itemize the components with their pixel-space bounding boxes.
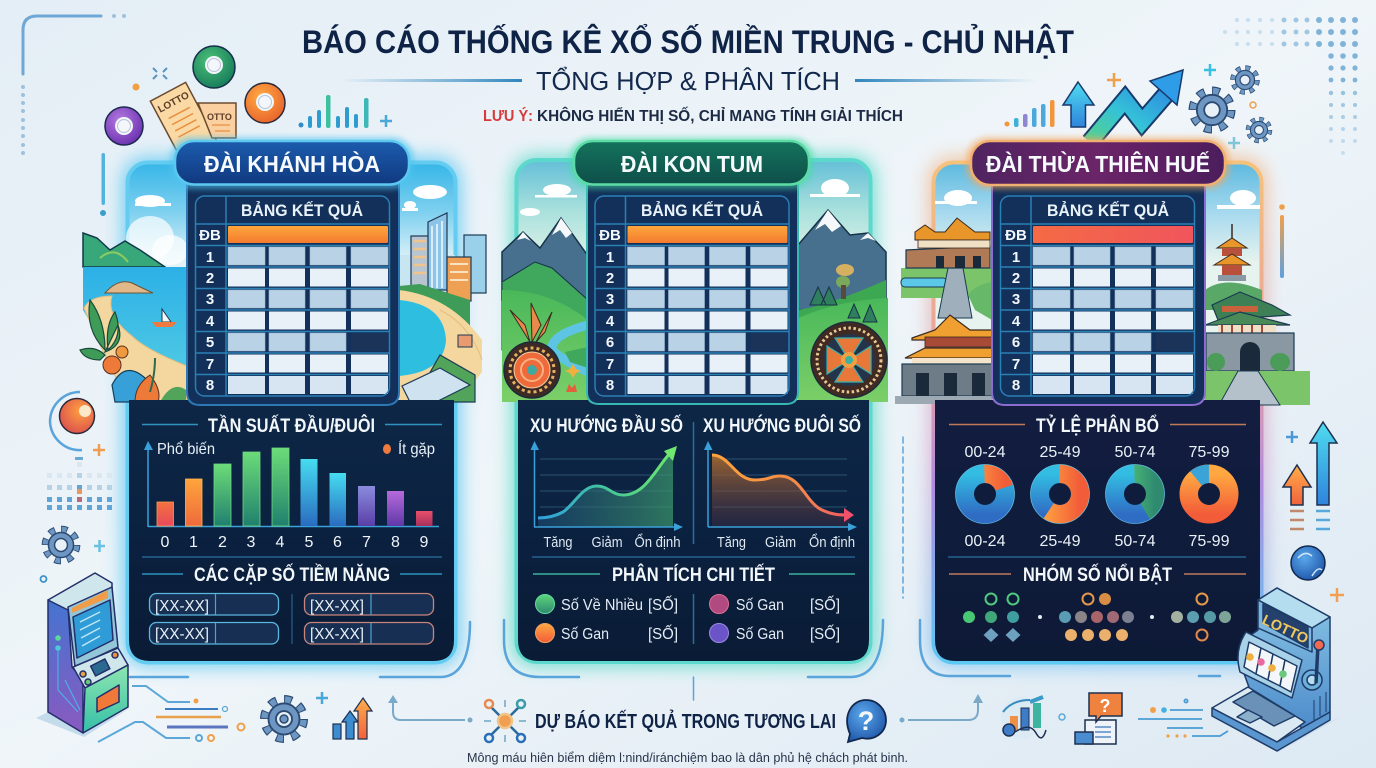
headings: Xu hướng đầu số / đuôi số (530, 415, 861, 544)
table 2: Kon Tum: 8 (606, 377, 614, 394)
table 1: Khánh Hòa: BẢNG KẾT QUẢ (241, 201, 363, 220)
illustration: lotto slot machine (1212, 588, 1342, 752)
bar chart: frequency: 3 (247, 534, 256, 551)
line chart: đuôi số (704, 441, 857, 551)
heading: Tần suất đầu/đuôi: TẦN SUẤT ĐẦU/ĐUÔI (208, 415, 375, 437)
detail legend: [SỐ] (648, 594, 678, 614)
bar chart: frequency: 2 (218, 534, 227, 551)
line chart: đuôi số: Tăng (717, 534, 746, 551)
header pill: Đài Khánh Hòa (170, 137, 414, 189)
bar chart: frequency: 1 (189, 534, 198, 551)
subtitle with rules (340, 66, 1036, 96)
header pill: Đài Kon Tum: ĐÀI KON TUM (621, 150, 763, 177)
detail legend: Số Gan (736, 597, 784, 614)
table 3: Thừa Thiên Huế: 1 (1012, 249, 1020, 266)
line chart: đầu số (530, 441, 683, 551)
table 3: Thừa Thiên Huế: ĐB (1005, 227, 1027, 244)
bar chart: frequency: 8 (391, 534, 400, 551)
detail legend: [SỐ] (810, 594, 840, 614)
bar chart: frequency: 6 (333, 534, 342, 551)
line chart: đầu số: Ổn định (634, 533, 680, 551)
bar chart: frequency: 0 (161, 534, 170, 551)
table 2: Kon Tum: 1 (606, 249, 614, 266)
scene: Huế pagoda and gate right (1205, 190, 1310, 405)
header pill: Đài Thừa Thiên Huế: ĐÀI THỪA THIÊN HUẾ (986, 150, 1210, 177)
table 1: Khánh Hòa (187, 183, 399, 405)
table 3: Thừa Thiên Huế: 4 (1012, 313, 1021, 330)
title: BÁO CÁO THỐNG KÊ XỔ SỐ MIỀN TRUNG - CHỦ NHẬT (302, 24, 1074, 60)
decoration: lottery balls and tickets (105, 46, 285, 163)
donut charts: distribution: 50-74 (1114, 533, 1156, 550)
decoration: lottery balls and tickets: OTTO (207, 112, 232, 122)
potential pairs list: [XX-XX] (155, 598, 209, 615)
scene: Kon Tum mountains left (502, 184, 588, 402)
detail legend: [SỐ] (810, 623, 840, 643)
panel 2 dark body (518, 400, 869, 661)
table 2: Kon Tum: 6 (606, 334, 614, 351)
decoration: growth arrows and gears top-right (1004, 64, 1285, 278)
table 2: Kon Tum: 7 (606, 356, 614, 373)
icon: chart with magnifier (1001, 697, 1065, 739)
footnote: Mông máu hiên biểm diệm l:nind/iránchiệm bao là dân phủ hệ chách phát binh. (467, 751, 908, 765)
table 2: Kon Tum: 3 (606, 291, 614, 308)
scene: Kon Tum mountains right (798, 179, 888, 402)
table 1: Khánh Hòa: ĐB (199, 227, 221, 244)
icon: question bubble: ? (858, 706, 874, 736)
potential pairs list: [XX-XX] (310, 598, 364, 615)
heading: Tỷ lệ phân bổ: TỶ LỆ PHÂN BỔ (1036, 415, 1159, 437)
table 1: Khánh Hòa: 1 (206, 249, 214, 266)
detail legend: [SỐ] (648, 623, 678, 643)
illustration: kiosk machine (36, 573, 130, 737)
icon: bottom gear (265, 692, 328, 738)
line chart: đuôi số: Ổn định (809, 533, 855, 551)
decoration: top-right dot grid (1223, 17, 1358, 155)
panel 1 glow and frame (122, 157, 461, 667)
table 1: Khánh Hòa: 4 (206, 313, 215, 330)
table 2: Kon Tum: 4 (606, 313, 615, 330)
donut charts: distribution: 00-24 (964, 444, 1006, 461)
detail legend: Số Gan (561, 626, 609, 643)
header pill: Đài Khánh Hòa: ĐÀI KHÁNH HÒA (204, 150, 380, 177)
table 2: Kon Tum: ĐB (599, 227, 621, 244)
bar chart: frequency: 7 (362, 534, 371, 551)
table 2: Kon Tum (587, 183, 798, 404)
illustration: lotto slot machine: LOTTO (1259, 612, 1311, 648)
line chart: đầu số: Giảm (592, 534, 622, 551)
icon: question bubble (847, 700, 886, 742)
panel 2 glow and frame (511, 155, 876, 667)
footer heading: DỰ BÁO KẾT QUẢ TRONG TƯƠNG LAI (535, 710, 836, 733)
donut charts: distribution: 25-49 (1040, 444, 1081, 461)
decoration: top-left corner bracket and dots (21, 14, 126, 216)
table 3: Thừa Thiên Huế: BẢNG KẾT QUẢ (1047, 201, 1169, 220)
line chart: đuôi số: Giảm (765, 534, 796, 551)
table 2: Kon Tum: BẢNG KẾT QUẢ (641, 201, 763, 220)
table 3: Thừa Thiên Huế: 8 (1012, 377, 1020, 394)
table 1: Khánh Hòa: 7 (206, 356, 214, 373)
scene: Khánh Hòa beach left (80, 195, 188, 402)
heading: Phân tích chi tiết: PHÂN TÍCH CHI TIẾT (612, 564, 775, 586)
table 1: Khánh Hòa: 5 (206, 334, 214, 351)
arrow: left flow (388, 695, 472, 722)
panel 3 dark body (935, 400, 1260, 661)
donut charts: distribution: 00-24 (964, 533, 1006, 550)
icon: network hub (484, 700, 526, 742)
potential pairs list: [XX-XX] (310, 626, 364, 643)
decoration: circuit lines left (98, 686, 244, 742)
bar chart: frequency: 9 (420, 534, 429, 551)
number group dots (963, 593, 1231, 642)
heading: Nhóm số nổi bật: NHÓM SỐ NỔI BẬT (1023, 564, 1172, 586)
icon: document with question: ? (1100, 696, 1110, 716)
table 1: Khánh Hòa: 2 (206, 270, 214, 287)
bar chart: frequency (144, 439, 439, 551)
subtitle with rules: TỔNG HỢP & PHÂN TÍCH (536, 66, 840, 96)
icon: left gear (40, 530, 105, 582)
scene: Huế citadel left (895, 190, 993, 404)
potential pairs list (150, 594, 434, 644)
detail legend: Số Về Nhiều (561, 597, 643, 614)
detail legend (536, 594, 840, 644)
heading: Các cặp số tiềm năng: CÁC CẶP SỐ TIỀM NĂNG (194, 564, 390, 586)
scene: Khánh Hòa city right (399, 185, 486, 402)
headings: Xu hướng đầu số / đuôi số: XU HƯỚNG ĐẦU SỐ (530, 415, 683, 437)
detail legend: Số Gan (736, 626, 784, 643)
panel brackets (130, 437, 1220, 700)
table 3: Thừa Thiên Huế: 2 (1012, 270, 1020, 287)
line chart: đầu số: Tăng (544, 534, 572, 551)
bar chart: frequency: 4 (276, 534, 285, 551)
icon: document with question (1075, 693, 1122, 744)
decoration: pixel grid bars (47, 457, 112, 510)
decoration: lottery balls and tickets: LOTTO (156, 90, 192, 116)
header pill: Đài Kon Tum (569, 137, 814, 189)
decoration: mini bars top-left (298, 95, 392, 128)
icon: bars with arrows (333, 698, 372, 739)
donut charts: distribution: 75-99 (1188, 444, 1230, 461)
table 3: Thừa Thiên Huế: 7 (1012, 356, 1020, 373)
donut charts: distribution: 75-99 (1188, 533, 1230, 550)
bar chart: frequency: Phổ biến (157, 440, 215, 458)
headings: Xu hướng đầu số / đuôi số: XU HƯỚNG ĐUÔI SỐ (703, 415, 861, 437)
bar chart: frequency: Ít gặp (398, 439, 435, 458)
header pill: Đài Thừa Thiên Huế (966, 137, 1230, 189)
decoration: circuit lines right (1138, 699, 1228, 738)
decoration: right arrows and ball (1283, 422, 1344, 602)
donut charts: distribution: 25-49 (1040, 533, 1081, 550)
donut charts: distribution: 50-74 (1114, 444, 1156, 461)
donut charts: distribution (956, 444, 1237, 550)
arrow: right flow (900, 694, 983, 722)
potential pairs list: [XX-XX] (155, 626, 209, 643)
note: KHÔNG HIỂN THỊ SỐ, CHỈ MANG TÍNH GIẢI THÍCH (537, 107, 903, 125)
table 2: Kon Tum: 2 (606, 270, 614, 287)
panel 3 glow and frame (928, 157, 1267, 667)
table 3: Thừa Thiên Huế: 6 (1012, 334, 1020, 351)
note: LƯU Ý: (483, 107, 533, 125)
table 3: Thừa Thiên Huế: 3 (1012, 291, 1020, 308)
decoration: left ball with arcs (50, 392, 105, 456)
panel 1 dark body (129, 400, 454, 661)
table 1: Khánh Hòa: 3 (206, 291, 214, 308)
bar chart: frequency: 5 (305, 534, 314, 551)
table 1: Khánh Hòa: 8 (206, 377, 214, 394)
table 3: Thừa Thiên Huế (992, 183, 1205, 405)
